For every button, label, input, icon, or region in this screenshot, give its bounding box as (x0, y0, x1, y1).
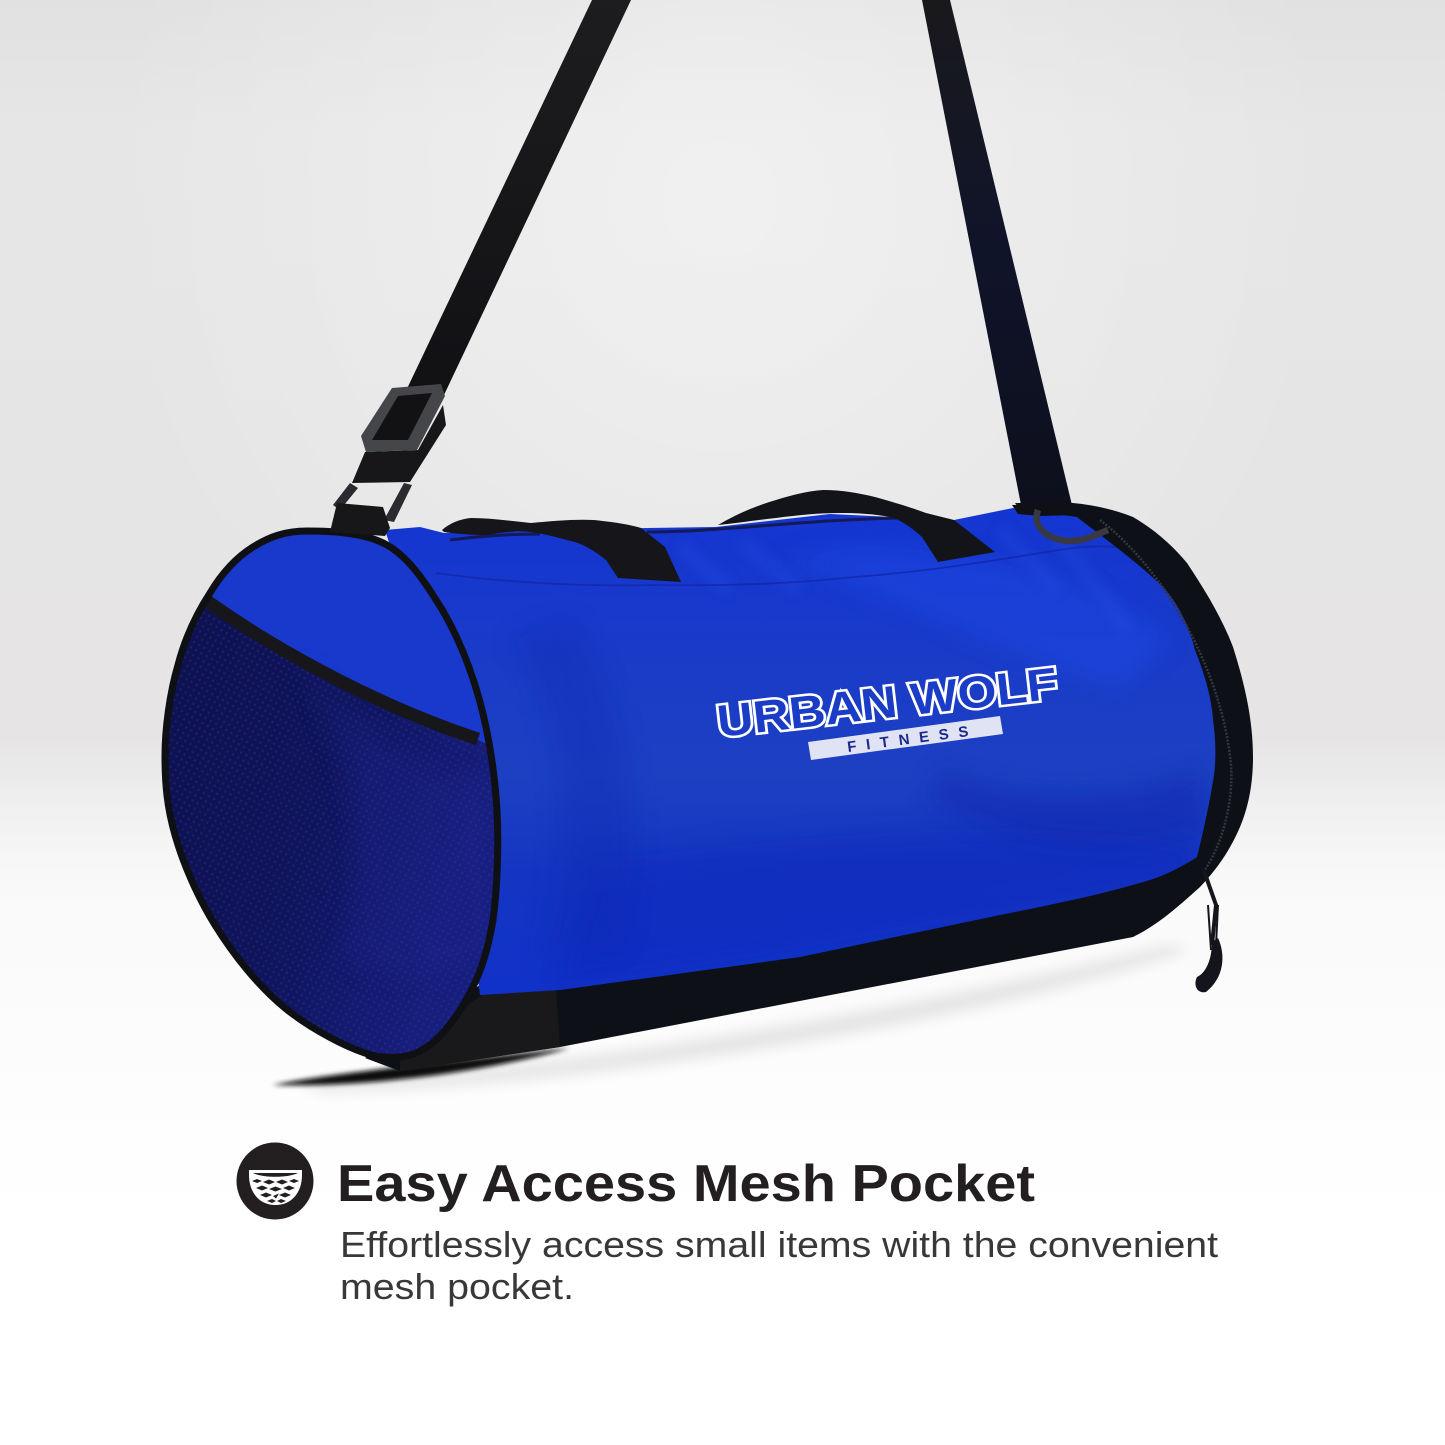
bag bottom and right black trim (365, 503, 1253, 1071)
logo: Urban Wolf Fitness: FITNESS (846, 723, 969, 756)
rear handle (718, 490, 995, 562)
top stitch line (436, 546, 1117, 585)
right shoulder strap (922, 0, 1072, 510)
icon: mesh pocket net badge (236, 1142, 314, 1220)
logo: Urban Wolf Fitness: URBAN WOLF (714, 658, 1060, 747)
mesh pocket (168, 608, 494, 1054)
heading: Easy Access Mesh Pocket (337, 1155, 1035, 1213)
left shoulder strap (404, 0, 631, 395)
zipper pull (1195, 868, 1222, 992)
zipper line on right trim (1100, 520, 1231, 872)
strap ring at right (1012, 503, 1108, 541)
fabric sheen (833, 554, 1156, 683)
black lower-left trim (400, 988, 560, 1071)
strap lower loop and buckle (330, 384, 446, 536)
description text: Effortlessly access small items with the convenient (340, 1224, 1218, 1265)
mesh pocket top binding (207, 601, 478, 739)
ground shadow under bag (272, 945, 1190, 1092)
duffel bag product illustration (150, 0, 1253, 1080)
left bag end panel (162, 528, 502, 1060)
front handle (442, 518, 681, 582)
description text: mesh pocket. (340, 1266, 574, 1307)
zipper seam at top (450, 518, 900, 540)
blue bag body (385, 508, 1215, 995)
